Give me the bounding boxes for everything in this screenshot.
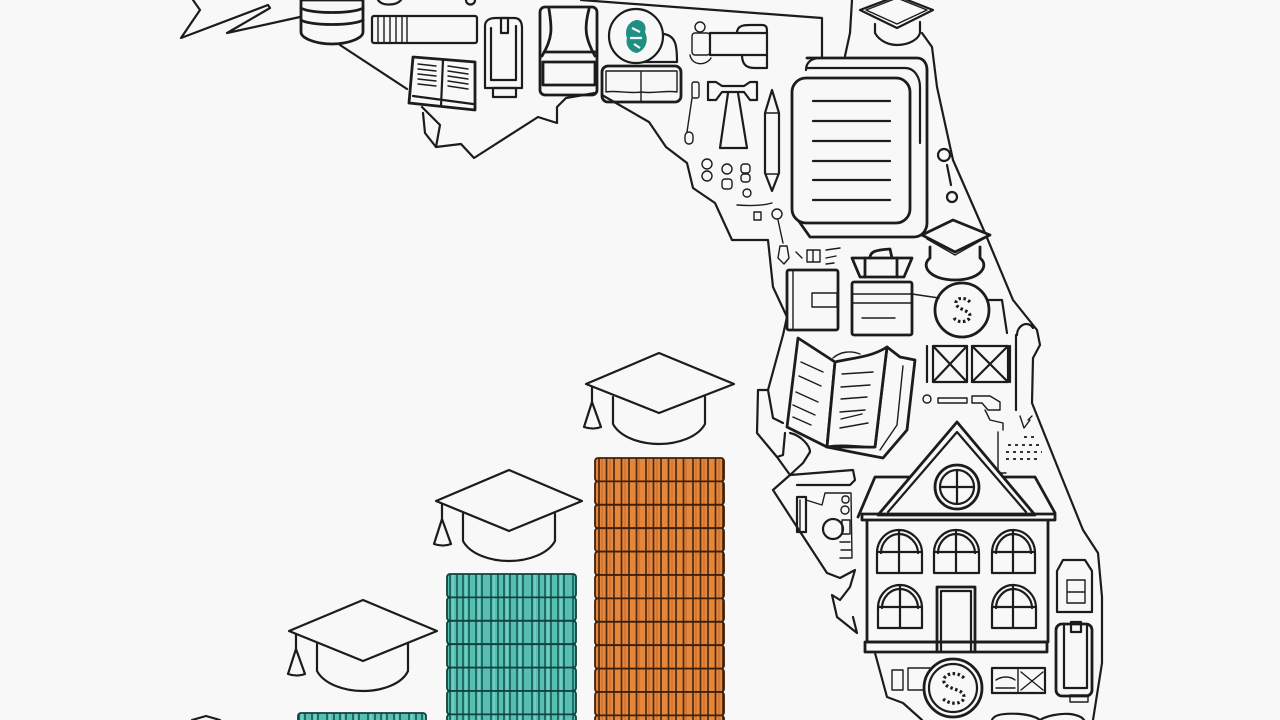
- windows, upper row: [877, 530, 1035, 573]
- icon: notepad: [792, 58, 927, 237]
- stack 3: orange: [595, 458, 724, 720]
- icon: backpack: [540, 7, 597, 95]
- windows, lower row: [878, 585, 1036, 628]
- icon: small open book: [409, 57, 475, 110]
- icon: small dots: [702, 159, 840, 264]
- icon: chain: [938, 149, 957, 202]
- icon: side bags: [1056, 560, 1092, 702]
- stack 1: teal: [298, 713, 426, 720]
- icon: schoolhouse: [858, 422, 1055, 652]
- icon: crossed boxes: [927, 346, 1010, 382]
- icon: graduation cap, right: [922, 220, 990, 280]
- icon: database stack: [301, 0, 363, 44]
- icon: wallet: [787, 270, 838, 330]
- bar chart: coin stacks: [298, 458, 724, 720]
- stack 2: teal: [447, 574, 576, 720]
- icon: graduation cap, large 3: [584, 353, 734, 444]
- icon: suitcase: [852, 249, 912, 335]
- icon: tools: [685, 82, 757, 148]
- icon: bottom row items: [892, 659, 1045, 717]
- icon: top fragments: [378, 0, 475, 4]
- small cap fragment: [192, 716, 220, 720]
- icon: dotted sand: [1006, 437, 1042, 459]
- icon: graduation cap, large 2: [434, 470, 582, 561]
- icon: large open book: [787, 338, 915, 458]
- map outline: Florida: [181, 0, 1102, 720]
- icon: graduation cap, top: [860, 0, 933, 45]
- door: [937, 587, 975, 652]
- icon: banded strip: [372, 16, 477, 43]
- icon: coin with teal emblem: [609, 9, 677, 63]
- icon: coin: [912, 283, 1007, 337]
- icon: graduation cap, large 1: [288, 600, 437, 691]
- icon: camera: [797, 493, 852, 558]
- icon: phone device: [485, 18, 522, 97]
- icon: tube and funnel: [923, 324, 1033, 473]
- icon: pencil: [765, 90, 779, 191]
- icon: glasses case: [602, 66, 681, 102]
- icon: bottom book fragment: [992, 714, 1084, 720]
- icon: roller device: [690, 22, 767, 68]
